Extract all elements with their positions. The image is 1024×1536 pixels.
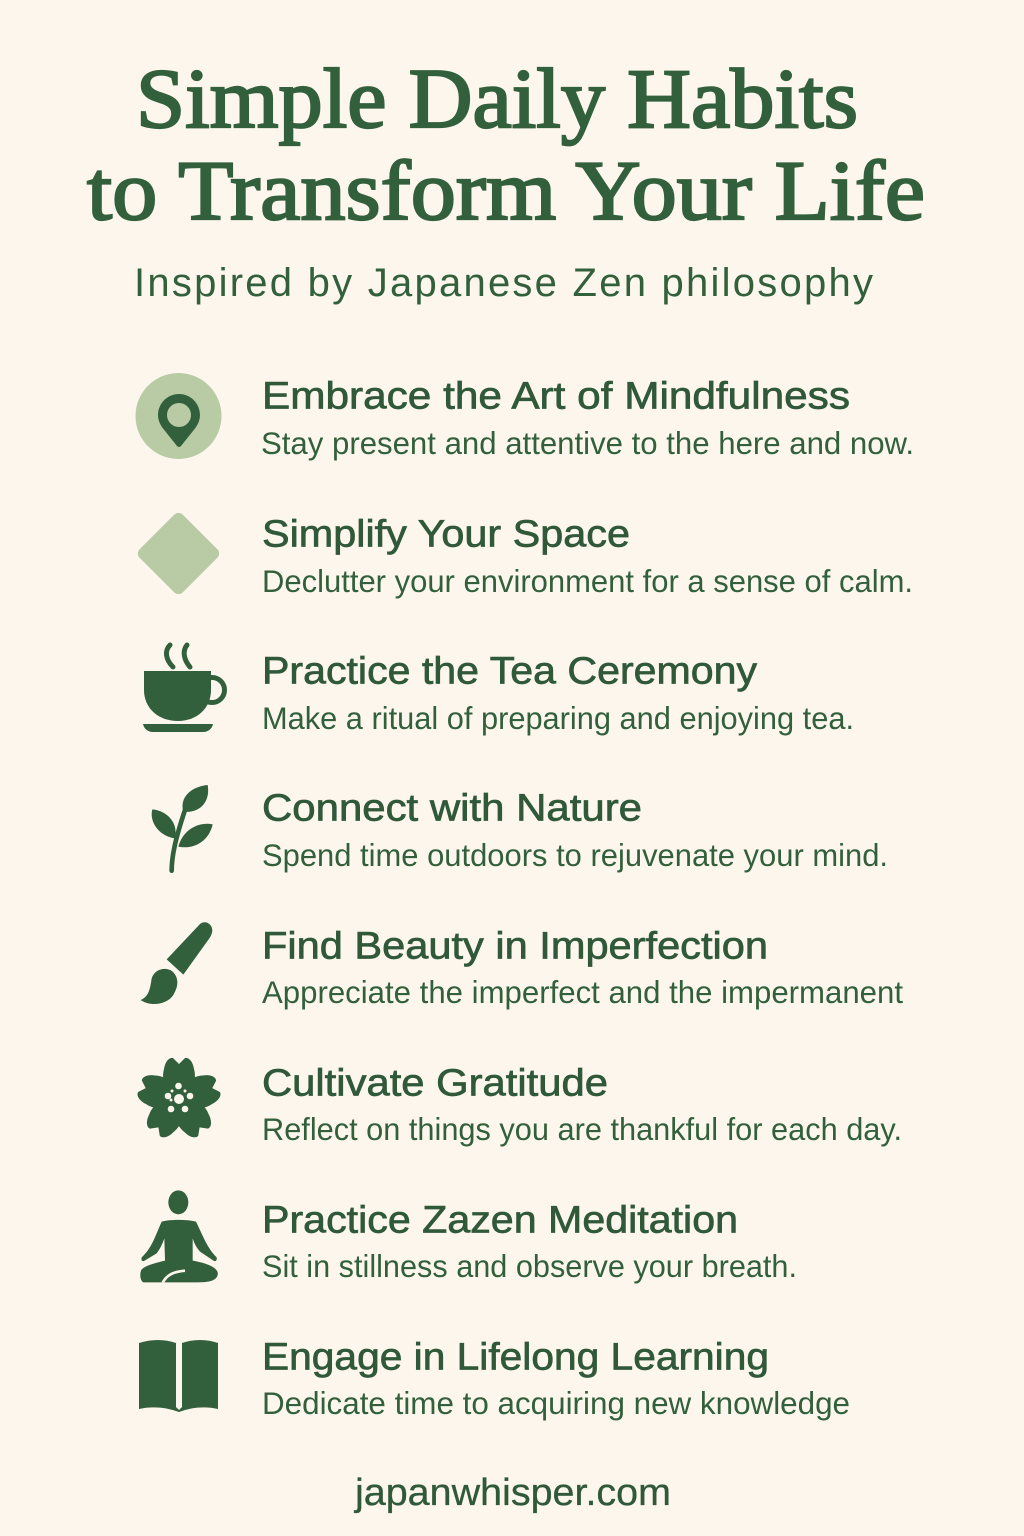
description: Declutter your environment for a sense of calm. <box>262 563 913 599</box>
heading: Practice Zazen Meditation <box>262 1200 738 1242</box>
icon: open book <box>139 1340 218 1412</box>
description: Spend time outdoors to rejuvenate your mind. <box>262 837 888 873</box>
subtitle: Inspired by Japanese Zen philosophy <box>134 261 873 305</box>
description: Reflect on things you are thankful for each day. <box>262 1111 902 1147</box>
icon: tea cup <box>143 645 224 732</box>
habit 7: zazen <box>140 1190 797 1284</box>
heading: Engage in Lifelong Learning <box>262 1336 769 1378</box>
description: Sit in stillness and observe your breath. <box>262 1248 797 1284</box>
description: Stay present and attentive to the here and now. <box>261 425 914 461</box>
icon: meditating figure <box>140 1190 218 1283</box>
description: Appreciate the imperfect and the impermanent <box>262 974 903 1010</box>
heading: Connect with Nature <box>262 788 642 830</box>
description: Dedicate time to acquiring new knowledge <box>262 1385 850 1421</box>
title <box>87 52 925 238</box>
icon: paint brush <box>141 922 212 1004</box>
icon: location pin <box>136 373 222 459</box>
habit 2: simplify <box>135 510 913 599</box>
title: Simple Daily Habits <box>136 52 858 146</box>
habit 4: nature <box>152 785 888 873</box>
heading: Simplify Your Space <box>262 514 630 556</box>
heading: Find Beauty in Imperfection <box>262 926 768 968</box>
habit 3: tea <box>143 645 854 736</box>
habit 8: learning <box>139 1336 850 1421</box>
habit 6: gratitude <box>135 1058 902 1147</box>
footer: website: japanwhisper.com <box>354 1472 671 1514</box>
heading: Embrace the Art of Mindfulness <box>262 376 850 418</box>
icon: diamond <box>135 510 222 597</box>
description: Make a ritual of preparing and enjoying tea. <box>262 700 854 736</box>
icon: cherry blossom <box>135 1058 223 1142</box>
heading: Cultivate Gratitude <box>262 1062 608 1104</box>
title: to Transform Your Life <box>87 144 925 238</box>
icon: sprout <box>152 785 213 871</box>
habit 1: mindfulness <box>136 373 914 461</box>
heading: Practice the Tea Ceremony <box>262 650 757 692</box>
habit 5: imperfection <box>141 922 903 1010</box>
